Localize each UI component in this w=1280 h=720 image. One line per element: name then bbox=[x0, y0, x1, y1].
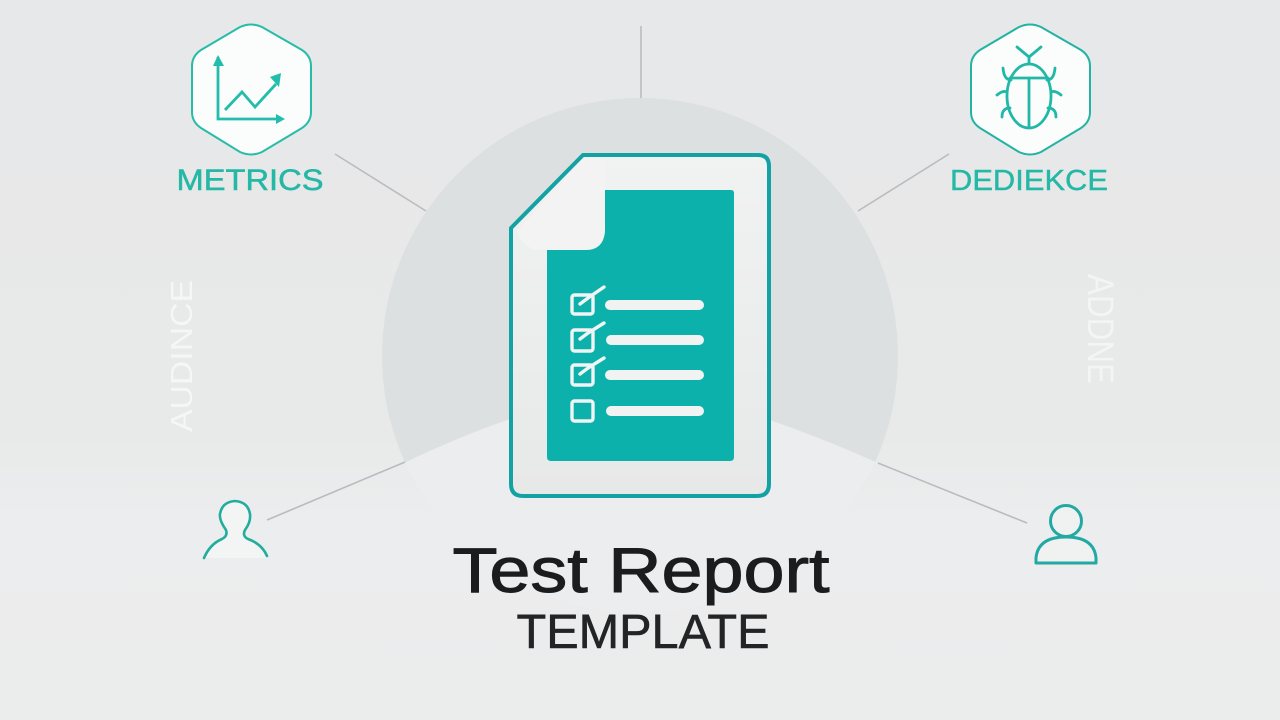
bug label: DEDIEKCE bbox=[950, 165, 1108, 197]
teal report panel bbox=[547, 190, 734, 461]
metrics label: METRICS bbox=[176, 164, 324, 197]
faint left label: AUDINCE bbox=[164, 280, 199, 432]
icon: right person bbox=[1036, 506, 1096, 563]
icon: bug hexagon bbox=[971, 24, 1090, 154]
document bbox=[511, 155, 769, 496]
icon: metrics hexagon bbox=[192, 24, 311, 154]
subtitle: TEMPLATE bbox=[516, 606, 770, 659]
folded corner bbox=[516, 158, 605, 250]
checklist bbox=[572, 287, 704, 421]
background semicircle bbox=[382, 98, 898, 462]
document outline bbox=[511, 155, 769, 496]
icon: left person bbox=[204, 501, 267, 558]
faint right label: ADDNE bbox=[1080, 274, 1121, 384]
title: Test Report bbox=[452, 536, 830, 606]
connector lines bbox=[267, 26, 1027, 523]
